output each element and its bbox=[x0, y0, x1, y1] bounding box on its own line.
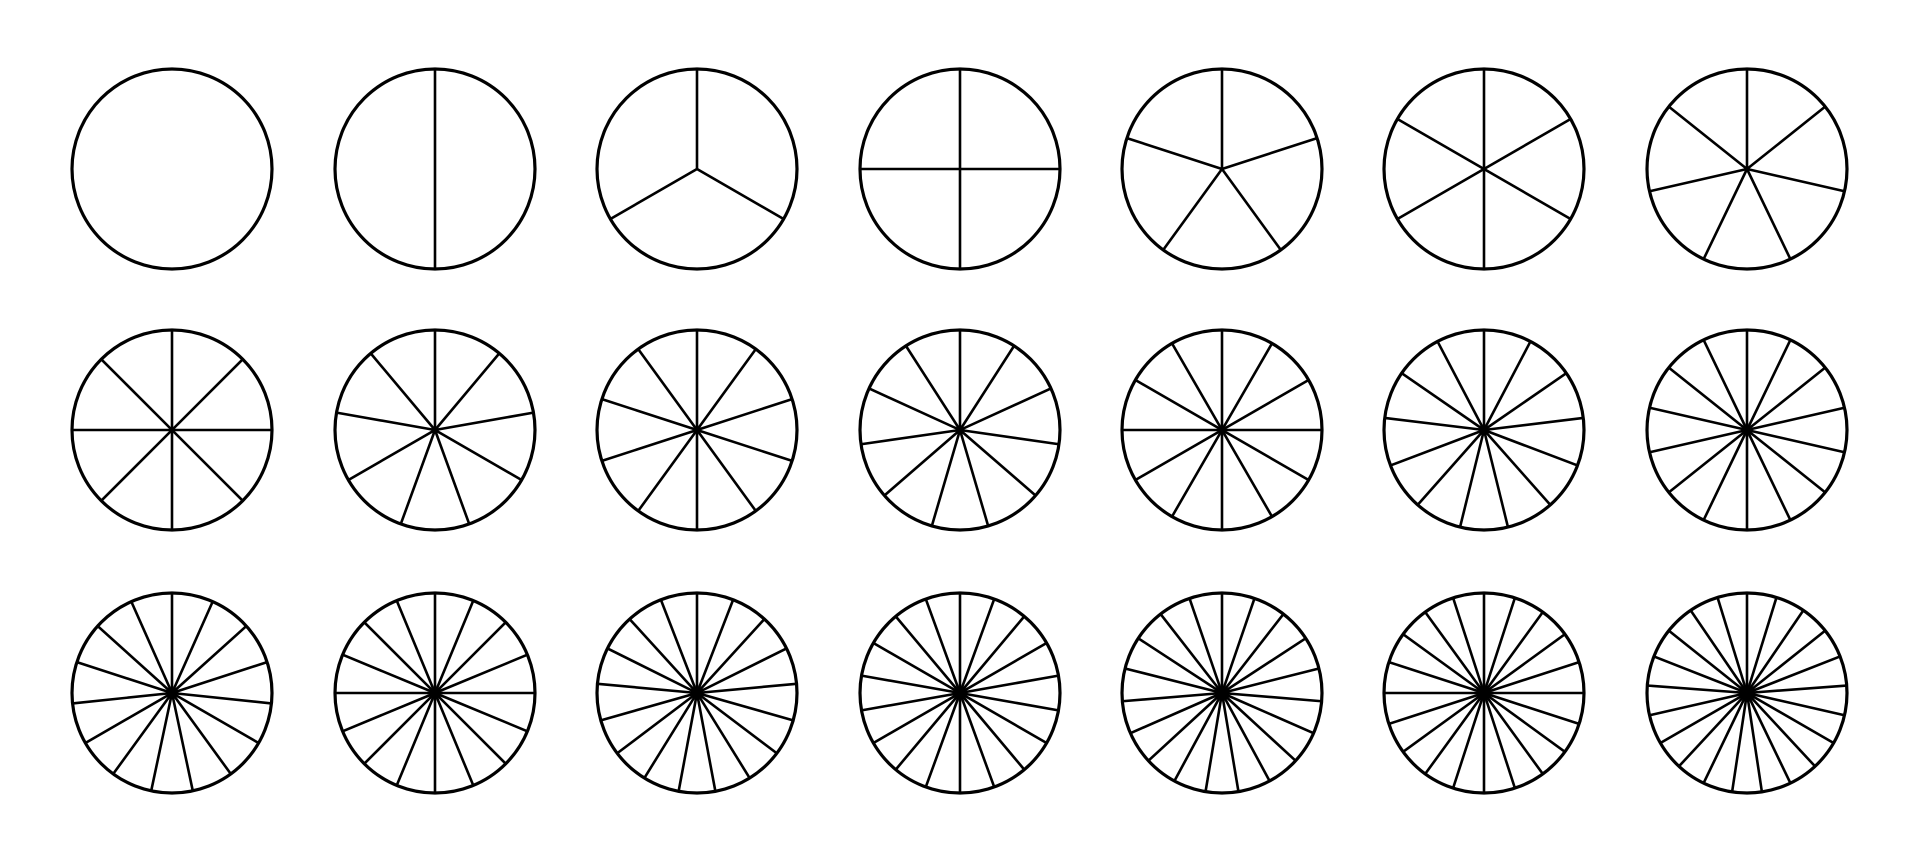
circle 12 bbox=[1122, 330, 1322, 530]
circle 2 halves bbox=[335, 69, 535, 269]
circle 17 bbox=[597, 593, 797, 793]
circle 15 bbox=[72, 593, 272, 793]
circle 21 bbox=[1647, 593, 1847, 793]
circle 16 bbox=[335, 593, 535, 793]
circle 19 bbox=[1122, 593, 1322, 793]
circle 11 bbox=[860, 330, 1060, 530]
circle 3 thirds bbox=[597, 69, 797, 269]
circle 8 eighths bbox=[72, 330, 272, 530]
circle 14 bbox=[1647, 330, 1847, 530]
circle 10 tenths bbox=[597, 330, 797, 530]
circle 20 bbox=[1384, 593, 1584, 793]
circle 13 bbox=[1384, 330, 1584, 530]
circle 9 ninths bbox=[335, 330, 535, 530]
circle 1 bbox=[72, 69, 272, 269]
circle 18 bbox=[860, 593, 1060, 793]
circle 6 sixths bbox=[1384, 69, 1584, 269]
circle 5 fifths bbox=[1122, 69, 1322, 269]
circle 4 quarters bbox=[860, 69, 1060, 269]
circle 7 sevenths bbox=[1647, 69, 1847, 269]
